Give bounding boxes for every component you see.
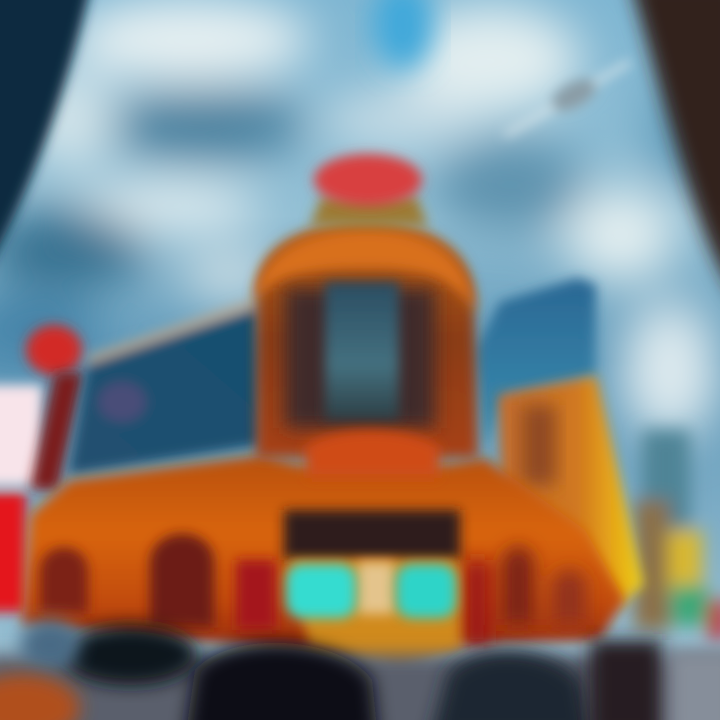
orange car corner [0, 674, 80, 720]
tower centre glass [325, 282, 399, 420]
teal screen left [286, 564, 356, 618]
entrance dark frame [284, 510, 460, 560]
red round sign [26, 325, 82, 375]
street [0, 655, 720, 720]
left white and red signage [0, 385, 42, 612]
wing window [522, 405, 556, 485]
left glass facade [68, 303, 262, 475]
blue sky patch [373, 0, 433, 70]
car centre [185, 643, 378, 720]
glass block right [476, 278, 596, 450]
tower top band [254, 230, 476, 312]
car left [62, 625, 198, 685]
teal screen right [396, 564, 456, 618]
street lamp [505, 62, 630, 135]
car right [430, 651, 592, 720]
canopy above entrance [305, 430, 440, 478]
car left blue top [20, 619, 80, 671]
entrance centre panel [358, 562, 394, 614]
clouds [0, 0, 720, 440]
entrance lower gold panel [288, 560, 462, 668]
dark building top right [630, 0, 720, 300]
red sign post [30, 372, 84, 490]
arched windows right [464, 546, 586, 645]
car far right [590, 640, 662, 720]
street and cars [0, 619, 720, 720]
tower dome base [310, 196, 428, 226]
arched windows left [40, 534, 276, 630]
tower dark panels [285, 288, 435, 428]
tower red dome [314, 154, 422, 206]
tower body [256, 222, 478, 458]
distant buildings right [634, 430, 720, 640]
dark building top left [0, 0, 92, 280]
right street light patch [668, 650, 720, 720]
lower orange facade [22, 455, 625, 650]
yellow and orange wing [498, 376, 644, 605]
central tower [254, 154, 478, 458]
